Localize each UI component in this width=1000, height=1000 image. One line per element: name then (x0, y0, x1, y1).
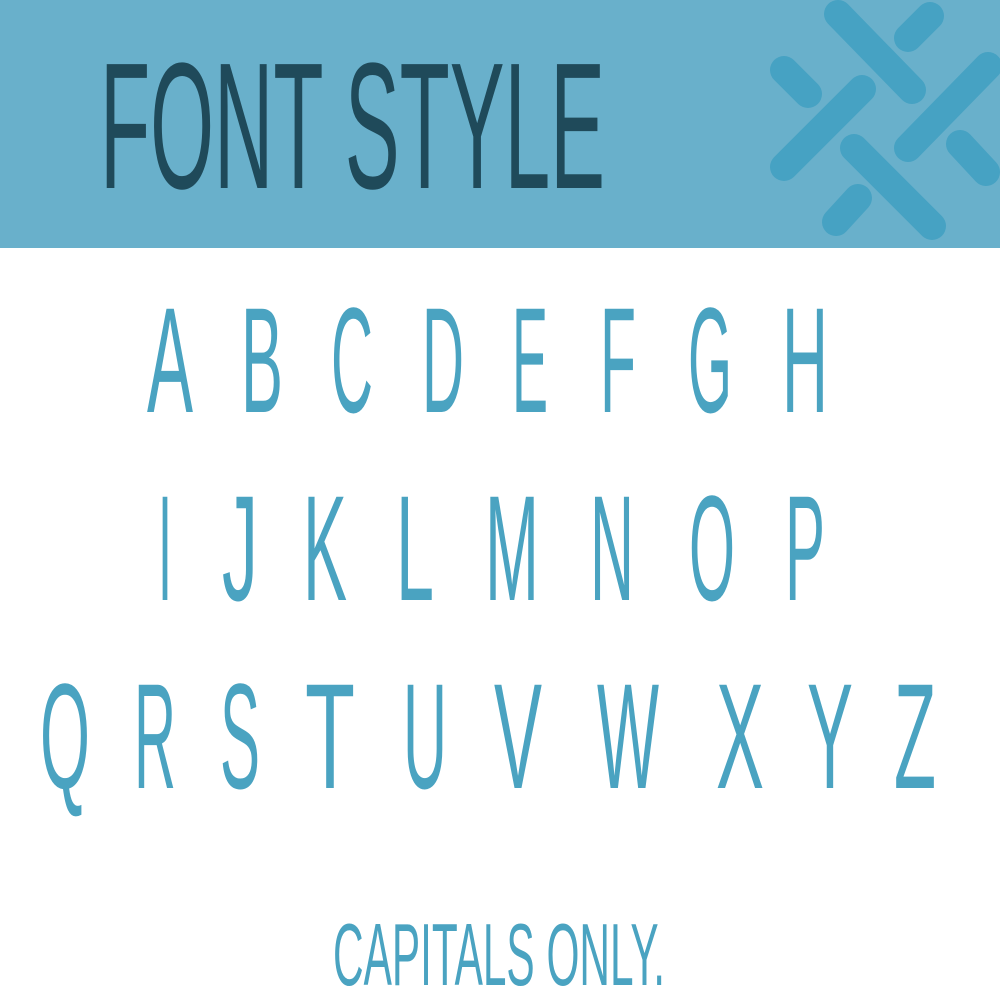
row 2: K (303, 464, 347, 632)
row 2: N (590, 464, 634, 632)
row 1 (147, 276, 828, 444)
icon: woven logo (784, 14, 988, 226)
row 2 (158, 464, 825, 632)
row 2: L (396, 464, 434, 632)
alphabet grid: P (785, 464, 825, 632)
row 1: E (512, 276, 548, 444)
row 2: M (485, 464, 539, 632)
row 3: V (494, 652, 542, 820)
row 3: Q (40, 652, 90, 820)
row 2: I (158, 464, 172, 632)
alphabet grid: H (782, 276, 828, 444)
row 1: G (688, 276, 732, 444)
row 3: Y (807, 652, 853, 820)
row 3: T (305, 652, 355, 820)
row 1: C (331, 276, 373, 444)
row 3: X (716, 652, 764, 820)
row 1: D (422, 276, 464, 444)
row 3: U (403, 652, 447, 820)
row 1: B (241, 276, 283, 444)
alphabet grid (40, 276, 936, 820)
text: Z (894, 652, 936, 820)
row 2: J (222, 464, 258, 632)
row 3 (40, 652, 936, 820)
row 3: R (134, 652, 176, 820)
row 3: S (220, 652, 260, 820)
row 1: F (600, 276, 636, 444)
row 3: W (597, 652, 659, 820)
row 1: A (147, 276, 193, 444)
header band (0, 0, 1000, 248)
row 2: O (689, 464, 735, 632)
